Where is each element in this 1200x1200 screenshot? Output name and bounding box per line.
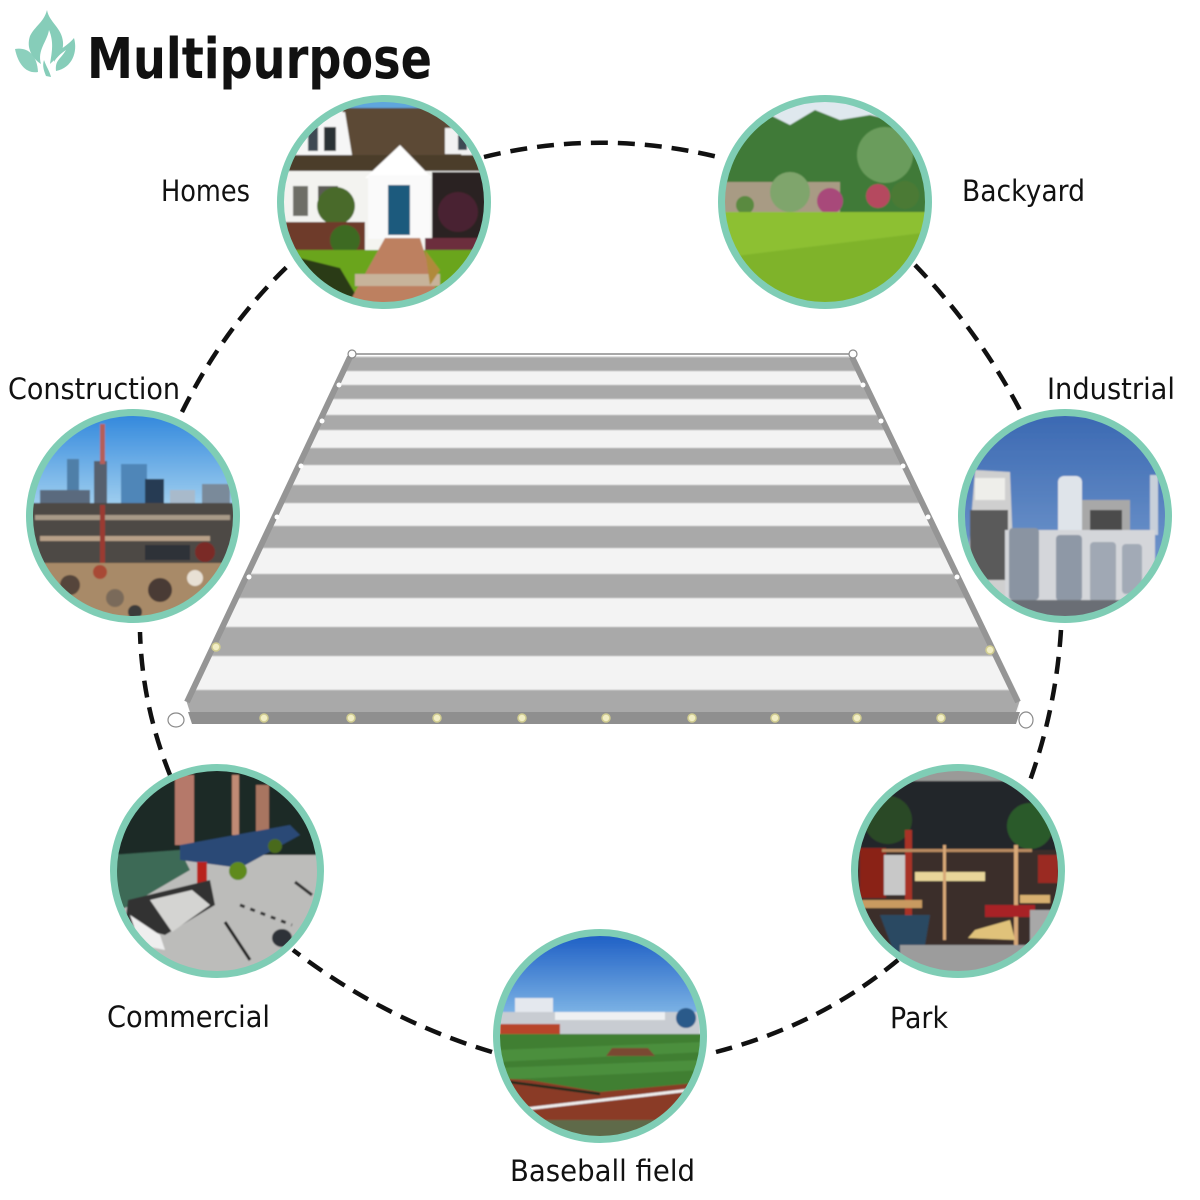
photo circle: homes <box>280 98 490 310</box>
title: Multipurpose <box>87 27 432 92</box>
label: Commercial: Commercial <box>107 1000 270 1034</box>
photo circle: industrial <box>960 412 1170 625</box>
photo circle: park <box>852 765 1064 985</box>
photo circle: backyard <box>720 98 930 307</box>
teal ring <box>962 412 1168 620</box>
label: Homes: Homes <box>161 174 250 208</box>
top hem <box>350 353 852 355</box>
corner rings <box>168 350 1033 728</box>
bottom hem <box>188 712 1020 724</box>
label: Backyard: Backyard <box>962 174 1085 208</box>
icon: green leaves <box>15 10 75 77</box>
side eyelets <box>246 382 960 580</box>
teal ring <box>722 98 928 306</box>
label: Construction: Construction <box>8 372 180 406</box>
product: striped shade cloth <box>150 350 1050 728</box>
teal ring <box>496 932 704 1140</box>
teal ring <box>854 768 1062 974</box>
dashed ring connecting the use cases <box>140 143 1061 1052</box>
photo circle: baseball field <box>495 932 705 1145</box>
teal ring <box>30 412 236 620</box>
label: Industrial: Industrial <box>1047 372 1175 406</box>
grommets <box>212 643 994 722</box>
grey stripes <box>150 357 1050 714</box>
label: Park: Park <box>890 1001 948 1035</box>
teal ring <box>114 768 320 974</box>
cloth body <box>186 356 1020 724</box>
teal ring <box>280 98 488 306</box>
photo circle: construction <box>28 412 238 623</box>
side hems <box>187 357 1018 702</box>
photo circle: commercial <box>112 765 322 975</box>
label: Baseball field: Baseball field <box>510 1154 695 1188</box>
